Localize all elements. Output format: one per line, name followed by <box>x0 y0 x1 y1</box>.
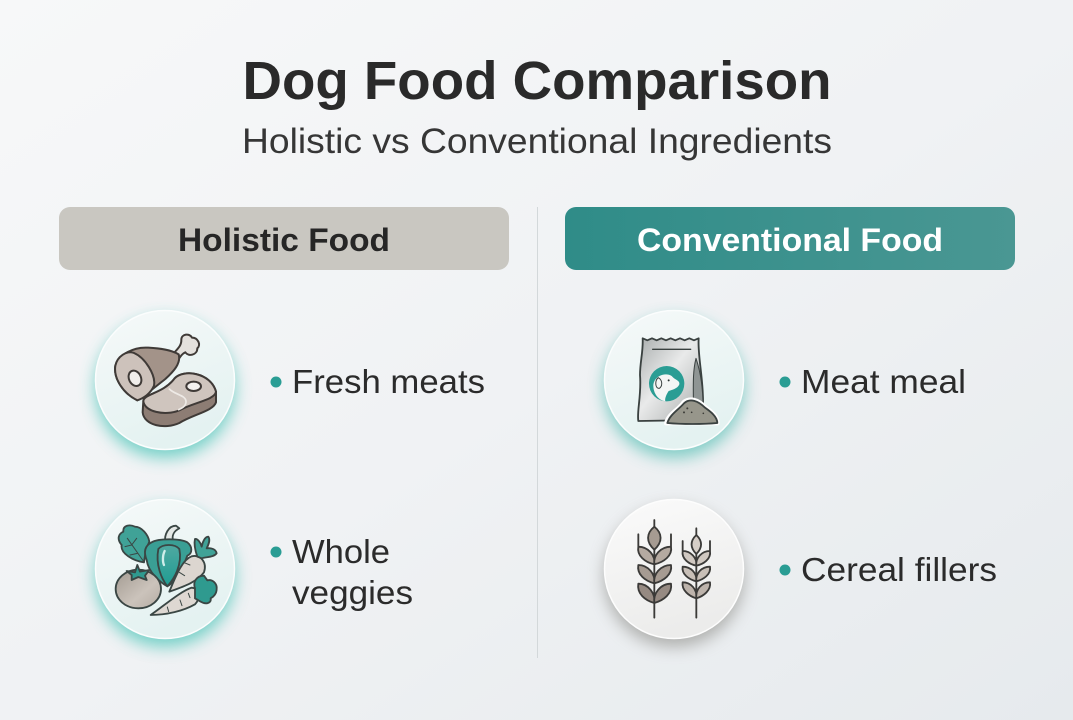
panel header: conventional food <box>565 207 1015 270</box>
bullet label: whole veggies: Whole <box>292 533 390 570</box>
title: Dog Food Comparison <box>242 51 832 111</box>
bullet label: whole veggies <box>270 533 413 611</box>
bullet label: meat meal: Meat meal <box>801 363 966 400</box>
panel header: conventional food: Conventional Food <box>637 222 943 258</box>
panel header: holistic food <box>59 207 509 270</box>
bullet label: whole veggies: veggies <box>292 574 413 611</box>
icon: kibble bag <box>604 310 744 458</box>
subtitle: Holistic vs Conventional Ingredients <box>242 122 832 161</box>
icon: whole veggies <box>95 500 235 647</box>
bullet label: fresh meats: Fresh meats <box>292 363 485 400</box>
icon: meats <box>95 310 235 458</box>
icon: wheat <box>604 500 744 647</box>
panel header: holistic food: Holistic Food <box>178 222 390 258</box>
bullet label: cereal fillers: Cereal fillers <box>801 551 997 588</box>
